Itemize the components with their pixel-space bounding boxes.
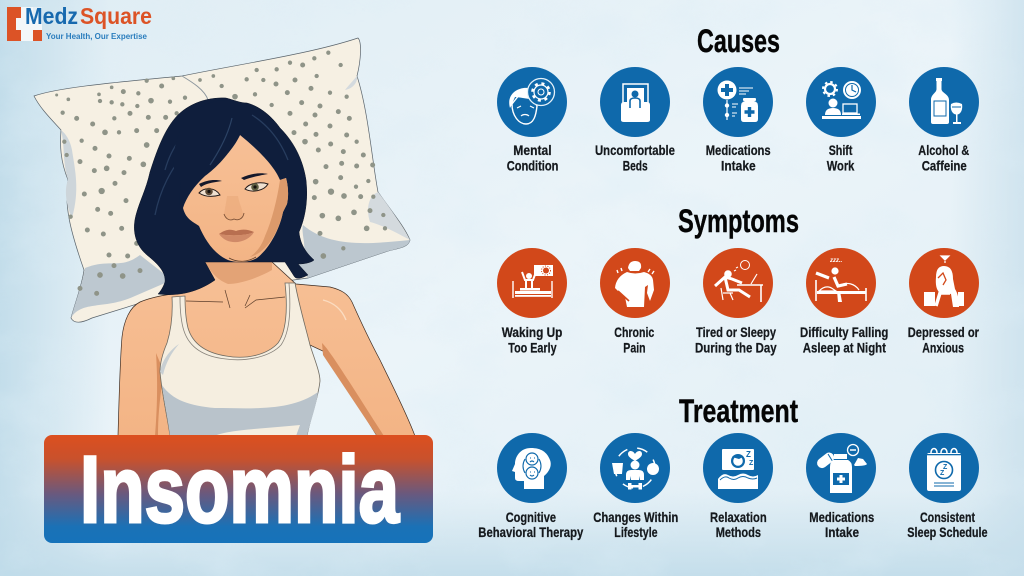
item: relaxation methods: Z (746, 450, 751, 459)
item: shift work (806, 67, 876, 174)
item: medications intake treatment: Medications (809, 509, 874, 525)
item: mental condition (497, 67, 567, 174)
item: changes within lifestyle: Lifestyle (614, 524, 658, 540)
chin line (229, 257, 256, 261)
nose (224, 196, 243, 220)
logo mark: medical cross (7, 7, 42, 41)
hair (134, 98, 314, 295)
hair fringe (173, 100, 240, 205)
item: relaxation methods: Z (749, 460, 754, 467)
item: consistent sleep schedule: Z (940, 470, 945, 477)
panel: symptoms (497, 203, 979, 356)
item: chronic pain: Chronic (614, 324, 654, 340)
heading: causes: Causes (697, 23, 780, 59)
item: waking up too early: Too Early (508, 340, 557, 356)
logo wordmark (25, 3, 152, 29)
item: consistent sleep schedule: Z (943, 464, 948, 471)
item: alcohol and caffeine: Alcohol & (918, 142, 969, 158)
item: tired or sleepy during the day (695, 248, 777, 356)
heading: treatment: Treatment (679, 393, 798, 429)
title text: Insomnia (80, 437, 400, 543)
item: mental condition: Mental (513, 142, 552, 158)
item: cognitive behavioral therapy: Cognitive (506, 509, 556, 525)
illustration: woman on pillow (34, 38, 415, 436)
logo tagline: Your Health, Our Expertise (46, 32, 148, 41)
heading: symptoms: Symptoms (678, 203, 799, 239)
panel: causes (497, 23, 979, 174)
arm shadows (155, 343, 384, 436)
item: uncomfortable beds: Beds (623, 158, 648, 174)
item: consistent sleep schedule: Sleep Schedule (907, 524, 988, 540)
item: medications intake: Medications (706, 142, 771, 158)
item: shift work: Work (827, 158, 855, 174)
pillow polka dots (56, 51, 387, 295)
tank top (160, 283, 320, 436)
item: mental condition: Condition (507, 158, 558, 174)
item: difficulty falling asleep at night (800, 248, 888, 356)
item: relaxation methods: Methods (716, 524, 761, 540)
item: medications intake treatment (806, 433, 876, 540)
title banner (44, 435, 433, 543)
item: chronic pain: Pain (623, 340, 646, 356)
item: alcohol and caffeine: Caffeine (922, 158, 967, 174)
item: relaxation methods (703, 433, 773, 540)
hair highlights (155, 108, 288, 215)
item: depressed or anxious (908, 248, 979, 356)
lips (219, 230, 254, 242)
item: waking up too early (497, 248, 567, 356)
item: depressed or anxious: Depressed or (908, 324, 979, 340)
item: uncomfortable beds (595, 67, 675, 174)
logo wordmark: Square (80, 3, 152, 29)
eyes (199, 183, 268, 196)
item: consistent sleep schedule (907, 433, 988, 540)
face shadow (250, 178, 288, 257)
body and arms (118, 262, 415, 436)
item: alcohol and caffeine (909, 67, 979, 174)
item: cognitive behavioral therapy: Behavioral Therapy (478, 524, 583, 540)
item: consistent sleep schedule: Consistent (920, 509, 975, 525)
panel: treatment (478, 393, 988, 540)
item: depressed or anxious: Anxious (922, 340, 964, 356)
item: relaxation methods: Relaxation (710, 509, 767, 525)
item: medications intake treatment: Intake (825, 524, 859, 540)
item: difficulty falling asleep at night: Asleep at Night (803, 340, 886, 356)
item: waking up too early: Waking Up (502, 324, 562, 340)
item: changes within lifestyle (593, 433, 678, 540)
brows (199, 173, 268, 187)
face (183, 135, 288, 262)
item: medications intake: Intake (721, 158, 756, 174)
item: uncomfortable beds: Uncomfortable (595, 142, 675, 158)
logo wordmark: Medz (25, 3, 78, 29)
item: medications intake (703, 67, 773, 174)
item: difficulty falling asleep at night: zzz.. (829, 258, 843, 264)
item: changes within lifestyle: Changes Within (593, 509, 678, 525)
pillow (34, 38, 410, 322)
item: chronic pain (600, 248, 670, 356)
item: tired or sleepy during the day: Tired or Sleepy (696, 324, 776, 340)
item: shift work: Shift (829, 142, 853, 158)
item: difficulty falling asleep at night: Difficulty Falling (800, 324, 888, 340)
item: cognitive behavioral therapy (478, 433, 583, 540)
item: tired or sleepy during the day: During the Day (695, 340, 777, 356)
logo (7, 3, 152, 41)
